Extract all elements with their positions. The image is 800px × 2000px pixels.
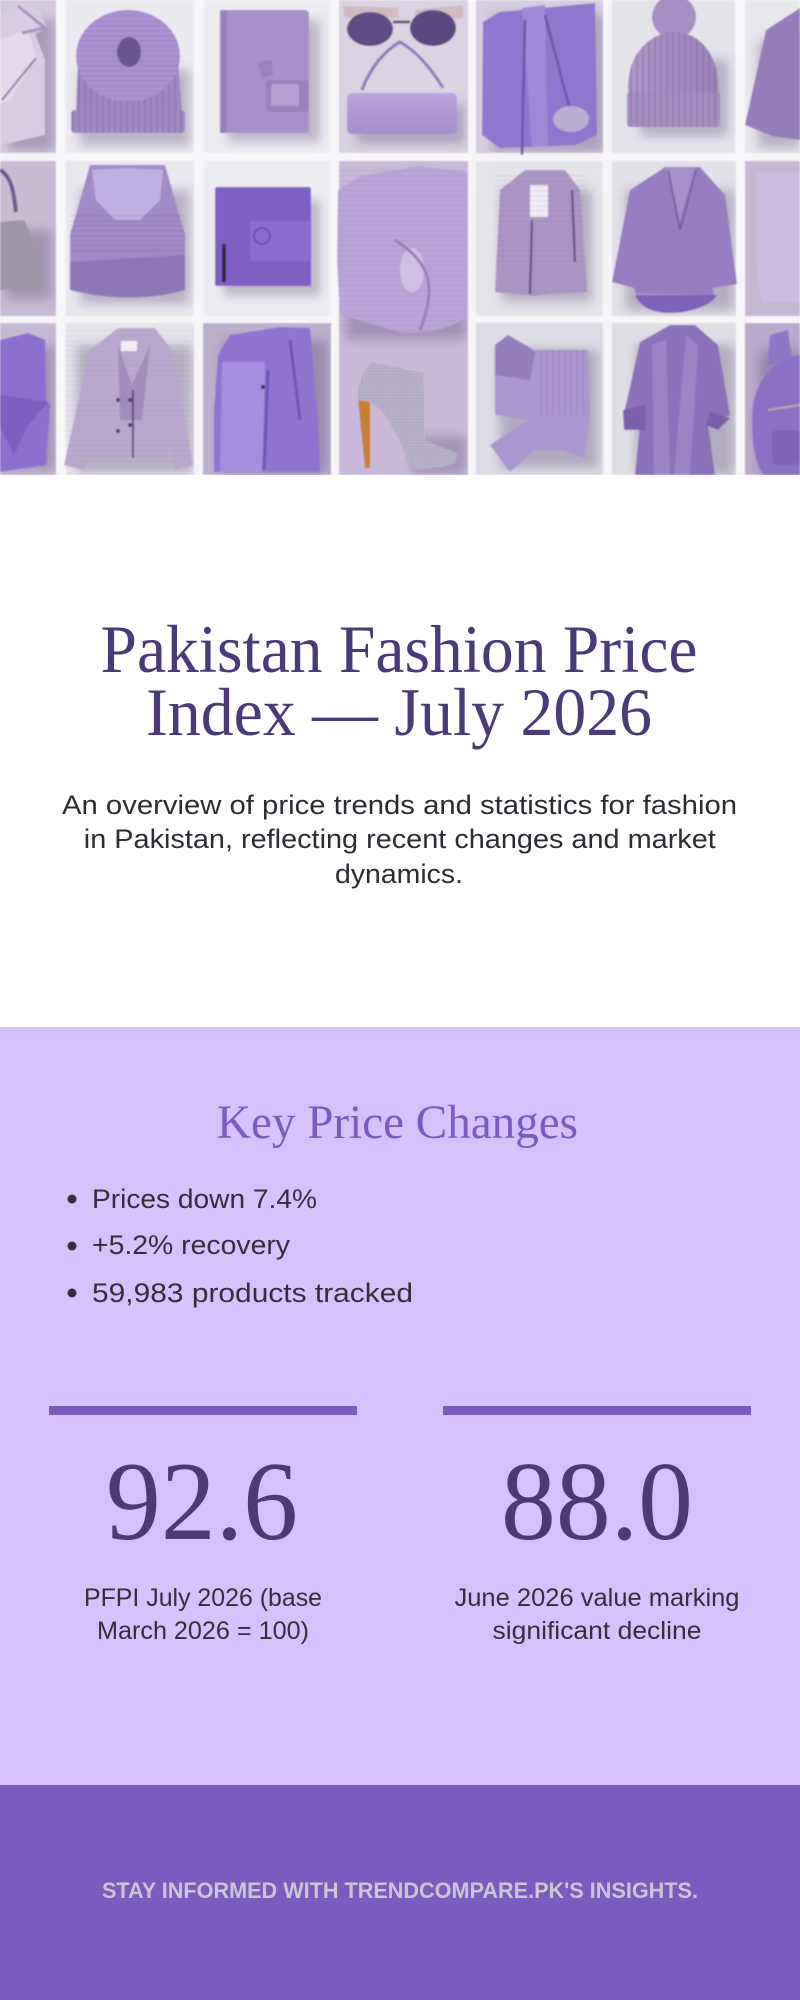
icon: glitter high heel — [357, 362, 457, 469]
title: Index — July 2026 — [146, 674, 652, 750]
icon: tweed jacket — [64, 328, 194, 470]
stat card: 92.6 — [49, 1406, 357, 1645]
bullet list: +5.2% recovery — [92, 1230, 291, 1260]
subtitle text block — [62, 790, 737, 889]
panel: key price changes — [0, 1027, 800, 1785]
icon: folded blouse — [0, 3, 47, 145]
stat card: 88.0: 88.0 — [501, 1440, 693, 1564]
subtitle text block: in Pakistan, reflecting recent changes and market — [84, 824, 716, 854]
heading: key price changes: Key Price Changes — [217, 1096, 578, 1149]
icon: jacket right edge — [745, 8, 800, 140]
stat card: 88.0 — [443, 1406, 751, 1645]
soft item shadows — [6, 14, 800, 475]
footer text: STAY INFORMED WITH TRENDCOMPARE.PK'S INSIGHTS. — [102, 1878, 698, 1903]
stat card: 92.6: March 2026 = 100) — [97, 1617, 309, 1645]
icon: scarf right edge — [755, 172, 800, 303]
hero photo: grid of purple fashion items — [0, 0, 800, 476]
icon: grey handbag — [0, 170, 40, 290]
icon: sunglasses and bag — [343, 5, 463, 134]
icon: notebook — [220, 10, 309, 133]
icon: sleeveless top — [70, 165, 185, 298]
subtitle text block: dynamics. — [335, 859, 463, 889]
stat card: 88.0: June 2026 value marking — [454, 1584, 740, 1612]
icon: blazer — [612, 167, 737, 313]
icon: ribbed sweater — [490, 335, 590, 472]
icon: folded violet shirt — [0, 333, 50, 472]
subtitle text block: An overview of price trends and statistics for fashion — [62, 790, 737, 820]
icon: cardigan — [495, 170, 587, 296]
bullet list — [68, 1184, 413, 1308]
stat card: 92.6: PFPI July 2026 (base — [84, 1584, 322, 1612]
footer banner — [0, 1785, 800, 2000]
icon: long coat — [623, 325, 730, 475]
icon: purple folder — [215, 187, 311, 286]
bullet list: 59,983 products tracked — [92, 1278, 413, 1308]
icon: backpack — [752, 330, 800, 475]
stat card: 92.6: 92.6 — [106, 1440, 298, 1564]
icon: satin trousers — [214, 327, 320, 472]
tile backgrounds — [0, 0, 800, 475]
icon: folded violet garment — [482, 3, 597, 155]
icon: chunky sweater — [337, 166, 468, 335]
icon: pom-pom hat — [627, 0, 720, 127]
bullet list: Prices down 7.4% — [92, 1184, 317, 1214]
title — [100, 611, 698, 750]
title: Pakistan Fashion Price — [100, 611, 698, 687]
icon: knit beanie with roll — [71, 10, 185, 133]
stat card: 88.0: significant decline — [492, 1617, 702, 1645]
